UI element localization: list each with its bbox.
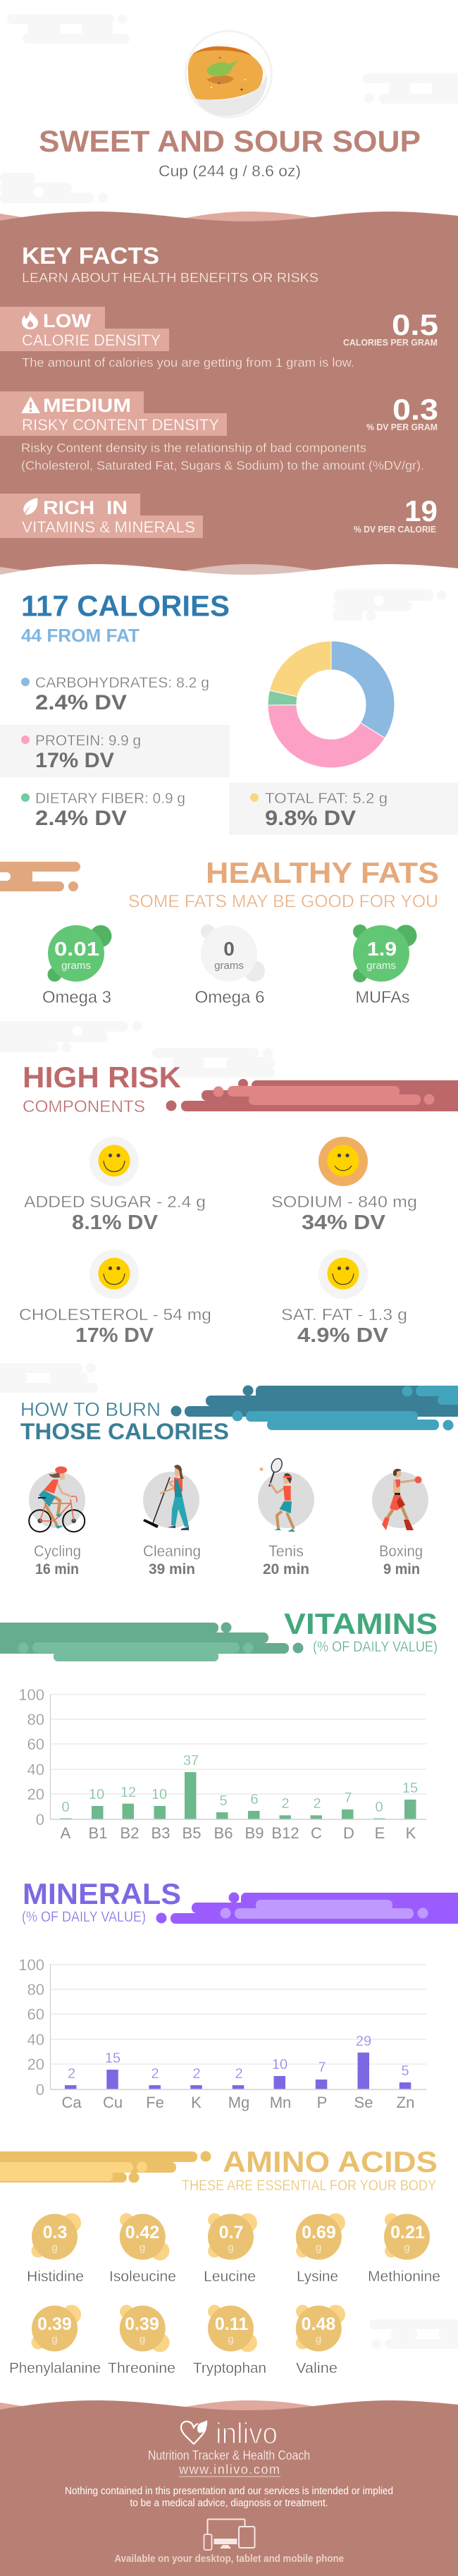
bar chart: minerals: 2 [235, 2066, 243, 2082]
bar chart: minerals: K [191, 2094, 202, 2111]
omega 6 badge: grams [214, 960, 244, 972]
activity: tennis [258, 1457, 314, 1577]
risky content description [21, 441, 424, 472]
healthy fats subheading: SOME FATS MAY BE GOOD FOR YOU [128, 891, 438, 911]
item: sodium: SODIUM - 840 mg [271, 1192, 417, 1211]
bar chart: vitamins: B2 [120, 1824, 139, 1842]
activity: cleaning: 39 min [149, 1561, 195, 1577]
bar chart: vitamins: 20 [27, 1786, 44, 1803]
icon: flame [22, 310, 38, 329]
components subheading: COMPONENTS [23, 1097, 145, 1116]
badge: leucine: 0.7 [219, 2223, 243, 2242]
panel: minerals [18, 1877, 458, 2111]
bar chart: minerals: 7 [318, 2060, 326, 2075]
icon: devices [204, 2519, 255, 2550]
header section [0, 14, 458, 203]
low description: The amount of calories you are getting from 1 gram is low. [22, 355, 354, 370]
bar chart: minerals: 100 [18, 1956, 44, 1974]
bar chart: minerals: 29 [356, 2034, 371, 2049]
icon: leaf [23, 498, 37, 515]
cloud decoration left [0, 173, 108, 203]
bar chart: minerals: 40 [27, 2031, 44, 2049]
activity: cycling: 16 min [35, 1561, 79, 1577]
bar chart: vitamins: 10 [151, 1787, 167, 1802]
activity: tennis: 20 min [263, 1561, 309, 1577]
amino decoration [0, 2151, 211, 2183]
header decoration [0, 862, 80, 891]
badge: methionine: Methionine [368, 2269, 440, 2285]
cloud decoration top left [7, 14, 130, 44]
macro: carbohydrates: CARBOHYDRATES: 8.2 g [35, 675, 209, 691]
panel: vitamins [0, 1607, 438, 1842]
icon: tennis player [259, 1457, 295, 1532]
medium risky content density: MEDIUM [43, 395, 131, 416]
activity: boxing [372, 1469, 428, 1577]
bar chart: minerals: Mn [270, 2094, 291, 2111]
bar chart: minerals: 80 [27, 1981, 44, 1998]
cloud decoration [333, 590, 447, 621]
cloud decoration [0, 1363, 98, 1393]
badge: isoleucine: Isoleucine [109, 2269, 176, 2285]
omega 3 badge: 0.01 [54, 938, 99, 960]
badge: valine: Valine [296, 2360, 338, 2376]
badge: tryptophan: g [228, 2333, 234, 2345]
bar chart: minerals: Se [354, 2094, 373, 2111]
bar chart: vitamins: 2 [313, 1796, 321, 1812]
stat: dv per gram: % DV PER GRAM [366, 422, 438, 432]
burn heading line 1: HOW TO BURN [20, 1398, 161, 1420]
badge: phenylalanine [9, 2305, 101, 2376]
donut chart [268, 641, 395, 768]
badge: threonine: 0.39 [125, 2314, 159, 2334]
logo: inlivo [181, 2417, 278, 2450]
badge: threonine [108, 2305, 175, 2376]
minerals heading: MINERALS [23, 1877, 181, 1910]
disclaimer: Nothing contained in this presentation and our services is intended or implied [65, 2485, 393, 2497]
cloud decoration [152, 1048, 275, 1078]
activity: boxing: Boxing [379, 1542, 423, 1560]
bar chart: vitamins: C [311, 1824, 322, 1842]
footer [0, 2400, 458, 2576]
mufas badge: grams [366, 960, 396, 972]
badge: methionine: g [404, 2242, 410, 2254]
badge: phenylalanine: g [51, 2333, 58, 2345]
bar chart: minerals: 2 [151, 2066, 159, 2082]
bar chart: minerals: 60 [27, 2006, 44, 2023]
macro: dietary fiber: 2.4% DV [35, 807, 127, 830]
cloud decoration right [363, 73, 458, 104]
macro: protein: 17% DV [35, 749, 114, 772]
macro: total fat [250, 790, 388, 830]
mufas badge: 1.9 [367, 938, 397, 960]
item: added sugar: 8.1% DV [72, 1211, 159, 1234]
key facts heading: KEY FACTS [22, 243, 159, 269]
minerals decoration [156, 1893, 458, 1924]
icon: boxer [382, 1469, 421, 1530]
bar chart: vitamins: 40 [27, 1761, 44, 1778]
bar chart: minerals [18, 1956, 426, 2111]
badge: threonine: g [140, 2333, 145, 2345]
bar chart: minerals: 10 [272, 2057, 287, 2073]
vitamins heading: VITAMINS [284, 1607, 438, 1640]
title: SWEET AND SOUR SOUP [39, 125, 421, 159]
activity: tennis: Tenis [268, 1542, 304, 1560]
low calorie density [0, 307, 169, 351]
row band: protein [0, 725, 230, 777]
vitamins subheading: (% OF DAILY VALUE) [313, 1639, 438, 1655]
bar chart: minerals: 2 [192, 2066, 201, 2082]
badge: lysine: g [316, 2242, 321, 2254]
panel: healthy fats [0, 856, 439, 1007]
bar chart: vitamins: 60 [27, 1735, 44, 1753]
bar chart: vitamins: 10 [89, 1787, 104, 1802]
item: sodium: 34% DV [302, 1211, 386, 1234]
activity: boxing: 9 min [383, 1561, 420, 1577]
rich in vitamins and minerals: RICH IN [43, 497, 128, 518]
omega 3 badge: grams [61, 960, 91, 972]
row band: total fat [229, 783, 458, 835]
cloud decoration left [0, 1021, 142, 1052]
low calorie density: LOW [43, 310, 92, 331]
disclaimer [65, 2485, 393, 2509]
omega 6 badge: 0 [223, 938, 235, 960]
item: saturated fat [281, 1250, 407, 1347]
macro: carbohydrates: 2.4% DV [35, 691, 127, 714]
stat: dv per gram: 0.3 [392, 393, 438, 426]
tagline: Nutrition Tracker & Health Coach [148, 2448, 310, 2462]
bar chart: vitamins: 0 [375, 1800, 383, 1815]
key facts subheading: LEARN ABOUT HEALTH BENEFITS OR RISKS [22, 270, 318, 285]
bar chart: minerals: Zn [397, 2094, 414, 2111]
badge: leucine: Leucine [204, 2269, 256, 2285]
stat: dv per calorie: 19 [404, 494, 438, 527]
badge: tryptophan: 0.11 [215, 2314, 248, 2334]
bar chart: vitamins: B9 [245, 1824, 264, 1842]
activity: cleaning: Cleaning [143, 1542, 201, 1560]
bar chart: vitamins: 100 [18, 1686, 44, 1704]
omega 3 badge: Omega 3 [42, 988, 111, 1007]
bar chart: minerals: Mg [228, 2094, 249, 2111]
healthy fats heading: HEALTHY FATS [206, 856, 439, 889]
macro: dietary fiber [21, 790, 185, 830]
medium risky content density: RISKY CONTENT DENSITY [22, 416, 219, 434]
badge: isoleucine: g [140, 2242, 145, 2254]
bar chart: vitamins: 0 [36, 1811, 44, 1829]
bar chart: vitamins [18, 1686, 426, 1842]
badge: methionine: 0.21 [390, 2223, 425, 2242]
rich in vitamins and minerals: VITAMINS & MINERALS [22, 518, 195, 536]
bar chart: vitamins: K [406, 1824, 416, 1842]
bar chart: minerals: 5 [401, 2063, 409, 2079]
panel: amino acids [0, 2145, 458, 2376]
badge: leucine: g [228, 2242, 234, 2254]
icon: warning triangle [21, 396, 40, 413]
bar chart: vitamins: 15 [402, 1781, 418, 1796]
bar chart: minerals: Ca [61, 2094, 82, 2111]
bar chart: minerals: 0 [36, 2081, 44, 2099]
panel: high risk components [0, 1021, 458, 1347]
macro: carbohydrates [21, 675, 209, 714]
omega 3 badge [42, 925, 111, 1007]
badge: valine: g [316, 2333, 321, 2345]
stat: calories per gram: CALORIES PER GRAM [343, 338, 438, 348]
badge: phenylalanine: 0.39 [37, 2314, 72, 2334]
bar chart: vitamins: B12 [271, 1824, 299, 1842]
badge: tryptophan [193, 2305, 266, 2376]
bar chart: minerals: 15 [105, 2051, 120, 2066]
amino heading: AMINO ACIDS [223, 2145, 438, 2178]
bar chart: minerals: P [317, 2094, 327, 2111]
from fat subheading: 44 FROM FAT [21, 625, 140, 646]
availability note: Available on your desktop, tablet and mobile phone [114, 2553, 344, 2565]
serving size: Cup (244 g / 8.6 oz) [159, 162, 301, 180]
macro: total fat: TOTAL FAT: 5.2 g [265, 790, 388, 807]
panel: how to burn those calories [0, 1363, 458, 1577]
badge: valine: 0.48 [302, 2314, 335, 2334]
disclaimer: to be a medical advice, diagnosis or treatment. [130, 2497, 328, 2509]
badge: histidine [27, 2213, 84, 2285]
bar chart: vitamins: E [375, 1824, 385, 1842]
badge: isoleucine: 0.42 [125, 2223, 159, 2242]
activity: cycling: Cycling [34, 1542, 81, 1560]
bar chart: vitamins: 5 [219, 1793, 228, 1809]
stat: calories per gram [343, 308, 438, 348]
item: cholesterol: CHOLESTEROL - 54 mg [19, 1305, 211, 1324]
bar chart: minerals: 20 [27, 2056, 44, 2073]
low calorie density: CALORIE DENSITY [22, 331, 161, 349]
badge: valine [296, 2305, 345, 2376]
stat: dv per calorie: % DV PER CALORIE [354, 525, 436, 535]
food image: soup bowl [186, 31, 272, 117]
macro: protein [21, 733, 141, 772]
macro: dietary fiber: DIETARY FIBER: 0.9 g [35, 790, 185, 807]
bar chart: vitamins: B1 [89, 1824, 107, 1842]
omega 6 badge: Omega 6 [194, 988, 265, 1007]
badge: isoleucine [109, 2213, 176, 2285]
badge: histidine: g [51, 2242, 58, 2254]
panel: key facts [0, 212, 458, 589]
cloud decoration [369, 2319, 458, 2349]
bottom wave [0, 564, 458, 589]
bar chart: vitamins: 6 [250, 1792, 259, 1807]
macro: protein: PROTEIN: 9.9 g [35, 733, 141, 749]
badge: phenylalanine: Phenylalanine [9, 2360, 101, 2376]
badge: threonine: Threonine [108, 2360, 175, 2376]
panel: calories [0, 590, 458, 835]
risky content description: (Cholesterol, Saturated Fat, Sugars & Sodium) to the amount (%DV/gr). [21, 458, 424, 472]
high risk heading: HIGH RISK [23, 1061, 181, 1094]
calories heading: 117 CALORIES [21, 590, 230, 622]
bar chart: vitamins: B6 [214, 1824, 233, 1842]
item: saturated fat: 4.9% DV [297, 1324, 389, 1347]
badge: leucine [204, 2213, 257, 2285]
macro: total fat: 9.8% DV [265, 807, 356, 830]
icon: cyclist [29, 1467, 85, 1532]
badge: lysine: 0.69 [302, 2223, 336, 2242]
bar chart: vitamins: D [343, 1824, 354, 1842]
mufas badge: MUFAs [355, 988, 410, 1007]
stat: dv per gram [366, 393, 438, 432]
badge: lysine: Lysine [297, 2269, 338, 2285]
item: cholesterol: 17% DV [75, 1324, 154, 1347]
item: added sugar [24, 1137, 206, 1234]
bar chart: vitamins: 80 [27, 1711, 44, 1728]
burn heading line 2: THOSE CALORIES [20, 1419, 229, 1444]
website link: www.inlivo.com [178, 2462, 280, 2477]
badge: histidine: Histidine [27, 2269, 84, 2285]
burn decoration [171, 1385, 458, 1430]
badge: tryptophan: Tryptophan [193, 2360, 266, 2376]
badge: lysine [296, 2213, 345, 2285]
vitamins decoration [0, 1622, 303, 1661]
stat: calories per gram: 0.5 [392, 308, 438, 341]
activity: cleaning [143, 1465, 201, 1577]
bar chart: vitamins: 0 [61, 1800, 70, 1815]
minerals subheading: (% OF DAILY VALUE) [22, 1909, 146, 1925]
omega 6 badge [194, 924, 265, 1007]
activity: cycling [29, 1467, 85, 1577]
high risk decoration [166, 1079, 458, 1111]
bar chart: vitamins: B5 [182, 1824, 201, 1842]
bar chart: vitamins: B3 [151, 1824, 170, 1842]
icon: person sweeping [143, 1465, 189, 1530]
bar chart: vitamins: A [61, 1824, 71, 1842]
bar chart: vitamins: 12 [120, 1785, 136, 1800]
bar chart: vitamins: 2 [281, 1796, 290, 1812]
footer wave background [0, 2400, 458, 2576]
bar chart: vitamins: 7 [344, 1790, 352, 1806]
logo: inlivo: inlivo [216, 2417, 278, 2450]
badge: histidine: 0.3 [43, 2223, 67, 2242]
bar chart: minerals: 2 [68, 2066, 75, 2082]
item: cholesterol [19, 1250, 211, 1347]
item: sodium [271, 1137, 417, 1234]
mufas badge [353, 924, 417, 1007]
bar chart: minerals: Fe [146, 2094, 164, 2111]
rich in vitamins and minerals [0, 494, 203, 538]
risky content description: Risky Content density is the relationship of bad components [21, 441, 366, 455]
stat: dv per calorie [354, 494, 438, 535]
item: added sugar: ADDED SUGAR - 2.4 g [24, 1192, 206, 1211]
badge: methionine [368, 2213, 440, 2285]
bar chart: minerals: Cu [103, 2094, 123, 2111]
top wave background [0, 212, 458, 578]
bar chart: vitamins: 37 [183, 1753, 199, 1769]
item: saturated fat: SAT. FAT - 1.3 g [281, 1305, 407, 1324]
medium risky content density [0, 391, 227, 436]
